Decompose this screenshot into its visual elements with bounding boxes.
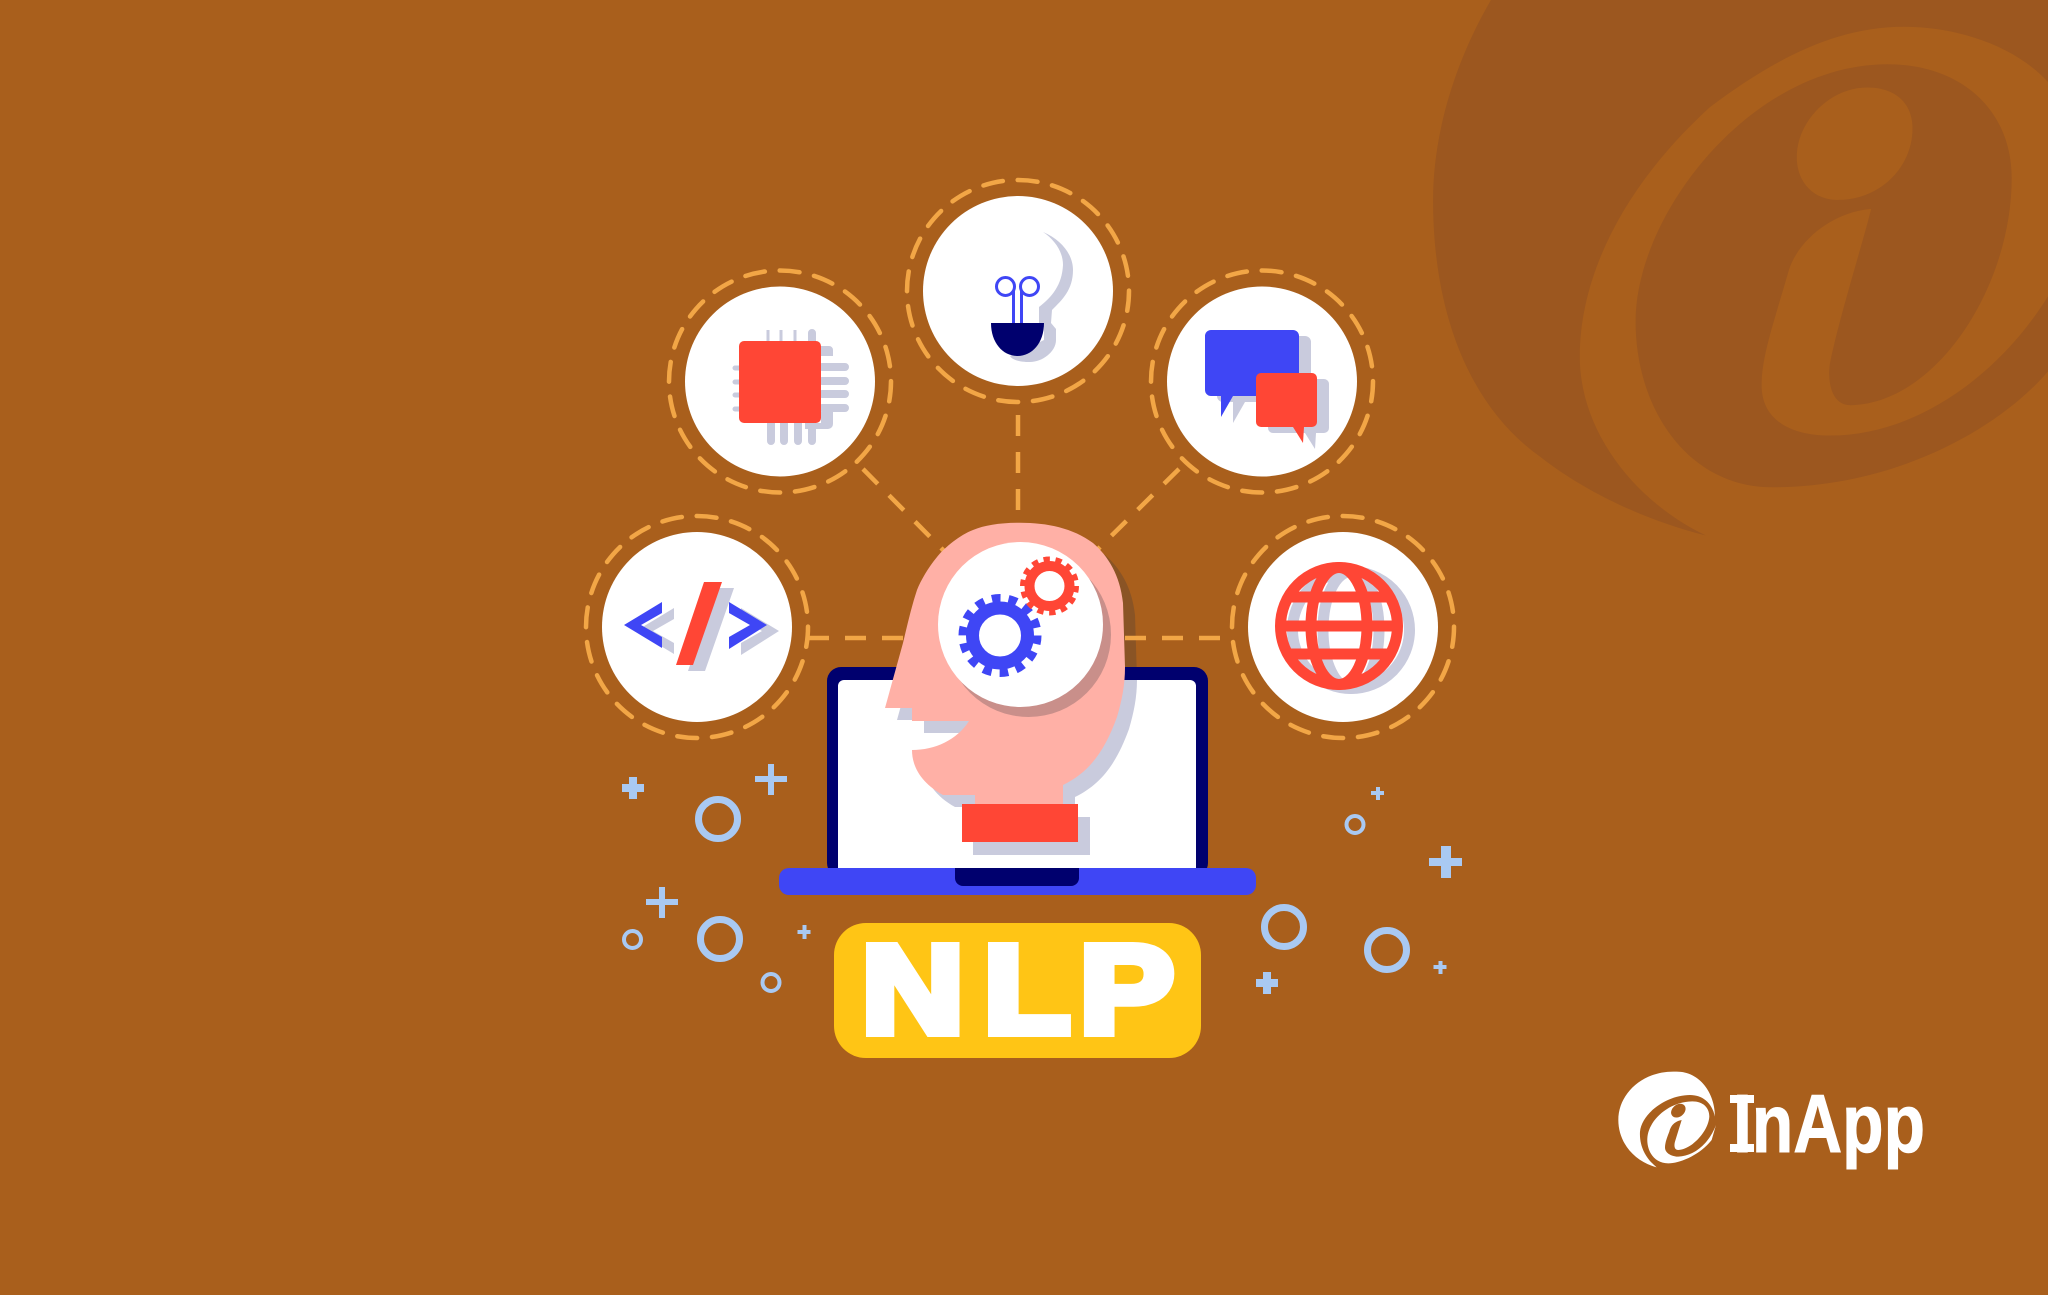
- decorative plus signs: [622, 764, 1462, 994]
- dashed connector lines: [808, 415, 1232, 638]
- InApp logo: [1618, 1072, 1925, 1170]
- icon: red gear: [1022, 559, 1076, 613]
- head cast shadow on background: [1104, 554, 1136, 667]
- node: microchip: [669, 270, 891, 492]
- NLP badge: NLP: [862, 920, 1174, 1060]
- icon: blue gear: [963, 598, 1037, 672]
- node: globe: [1232, 516, 1454, 738]
- node: code brackets: [586, 516, 808, 738]
- logo mark: [1618, 1072, 1716, 1167]
- decorative rings: [624, 800, 1406, 991]
- watermark logo: [1433, 0, 2048, 536]
- node: chat bubbles: [1151, 270, 1373, 492]
- head with gears: [885, 523, 1137, 855]
- laptop base: [779, 868, 1256, 895]
- node: light bulb: [907, 180, 1129, 402]
- collar: [962, 804, 1090, 855]
- infographic canvas: [584, 0, 2048, 1170]
- laptop: [779, 667, 1256, 895]
- logo wordmark: InApp: [1733, 1077, 1925, 1170]
